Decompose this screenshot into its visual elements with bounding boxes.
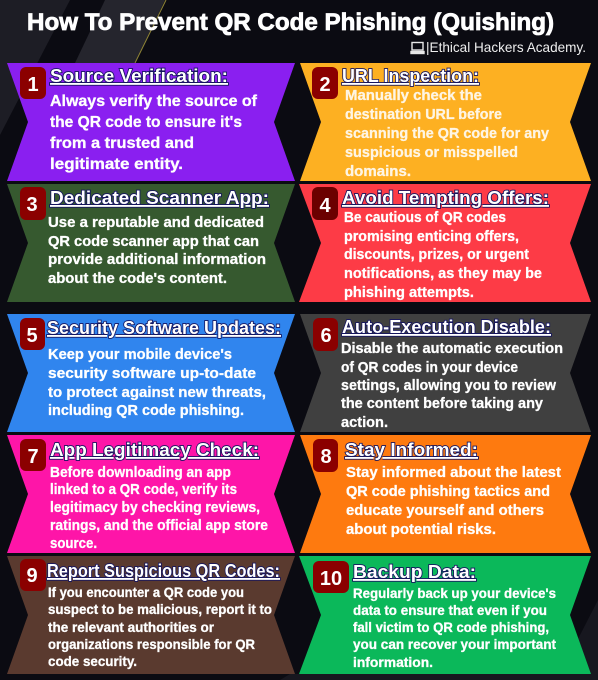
text 7: source. — [50, 536, 97, 552]
text 1: the QR code to ensure it's — [50, 114, 242, 131]
heading 1: Source Verification: — [50, 65, 228, 86]
badge 5: 5 — [26, 325, 38, 347]
badge 3: 3 — [26, 194, 38, 216]
badge 8 — [313, 439, 338, 472]
text 9 — [48, 585, 272, 669]
text 1: Always verify the source of — [50, 93, 258, 110]
text 2: Manually check the — [345, 88, 482, 104]
text 1: legitimate entity. — [50, 156, 183, 173]
text 9: the relevant authorities or — [48, 620, 215, 635]
text 6: settings, allowing you to review — [341, 378, 557, 394]
text 2: domains. — [345, 164, 411, 180]
text 10: information. — [353, 655, 433, 670]
badge 10 — [313, 561, 349, 593]
text 6: the content before taking any — [341, 396, 543, 412]
heading 9: Report Suspicious QR Codes: — [47, 560, 280, 581]
text 10: Regularly back up your device's — [353, 586, 556, 601]
text 7: Before downloading an app — [50, 465, 231, 481]
text 6: Disable the automatic execution — [341, 341, 563, 357]
text 2: suspicious or misspelled — [345, 145, 518, 161]
text 8: Stay informed about the latest — [346, 465, 561, 481]
badge 7 — [20, 439, 46, 471]
text 7 — [50, 465, 268, 552]
text 4 — [344, 210, 542, 301]
panel 8: Stay Informed — [300, 435, 591, 553]
text 9: organizations responsible for QR — [48, 637, 255, 652]
heading 10: Backup Data: — [353, 561, 476, 582]
text 10 — [353, 586, 556, 670]
text 10: you can recover your important — [353, 637, 556, 652]
panel 10: Backup Data — [299, 556, 591, 674]
badge 2 — [312, 67, 338, 99]
heading 7: App Legitimacy Check: — [50, 439, 259, 460]
text 5: Keep your mobile device's — [48, 347, 232, 363]
icon: laptop — [411, 42, 424, 54]
text 7: ratings, and the official app store — [50, 518, 268, 534]
text 2: scanning the QR code for any — [345, 126, 549, 142]
text 6 — [341, 341, 563, 431]
text 8 — [346, 465, 561, 538]
panel 4: Avoid Tempting Offers — [299, 184, 591, 302]
badge 2: 2 — [319, 74, 331, 96]
text 10: fall victim to QR code phishing, — [353, 620, 549, 635]
text 1: from a trusted and — [50, 135, 194, 152]
badge 7: 7 — [27, 446, 39, 468]
panel 1: Source Verification — [7, 63, 295, 181]
badge 9 — [20, 559, 46, 591]
text 6: of QR codes in your device — [341, 360, 518, 376]
text 7: legitimacy by checking reviews, — [50, 500, 260, 516]
heading 2: URL Inspection: — [342, 65, 479, 86]
text 5 — [48, 347, 266, 419]
text 8: educate yourself and others — [346, 503, 544, 519]
text 3: QR code scanner app that can — [48, 234, 259, 250]
badge 8: 8 — [320, 446, 332, 468]
badge 9: 9 — [26, 565, 38, 587]
text 10: data to ensure that even if you — [353, 603, 547, 618]
text 4: discounts, prizes, or urgent — [344, 247, 529, 263]
badge 10: 10 — [320, 568, 342, 590]
heading 5: Security Software Updates: — [47, 317, 281, 338]
text 8: QR code phishing tactics and — [346, 484, 550, 500]
badge 3 — [20, 187, 46, 220]
heading 3: Dedicated Scanner App: — [50, 187, 269, 208]
text 9: suspect to be malicious, report it to — [48, 602, 272, 617]
text 4: phishing attempts. — [344, 285, 474, 301]
text 8: about potential risks. — [346, 522, 496, 538]
text 3 — [48, 215, 266, 287]
badge 1 — [20, 67, 46, 99]
text 3: provide additional information — [48, 252, 266, 268]
text 2: destination URL before — [345, 107, 502, 123]
text 5: security software up-to-date — [48, 366, 256, 382]
badge 1: 1 — [27, 74, 39, 96]
text 7: linked to a QR code, verify its — [50, 482, 237, 498]
title: How To Prevent QR Code Phishing (Quishing) — [27, 9, 554, 36]
heading 8: Stay Informed: — [345, 439, 478, 460]
badge 4: 4 — [319, 195, 331, 217]
badge 6 — [313, 318, 338, 351]
text 6: action. — [341, 415, 388, 431]
text 3: Use a reputable and dedicated — [48, 215, 264, 231]
text 3: about the code's content. — [48, 271, 227, 287]
badge 4 — [312, 187, 338, 220]
panel 6: Auto-Execution Disable — [300, 314, 591, 432]
panel 2: URL Inspection — [300, 63, 591, 181]
text 4: notifications, as they may be — [344, 266, 542, 282]
badge 5 — [20, 318, 45, 350]
text 4: promising enticing offers, — [344, 229, 519, 245]
text 5: to protect against new threats, — [48, 385, 266, 401]
text 1 — [50, 93, 258, 173]
panel 7: App Legitimacy Check — [7, 435, 295, 553]
panel 3: Dedicated Scanner App — [7, 184, 295, 302]
logo: Ethical Hackers Academy: |Ethical Hackers Academy. — [426, 39, 586, 55]
panel 9: Report Suspicious QR Codes — [7, 556, 295, 674]
panel 5: Security Software Updates — [7, 314, 295, 432]
badge 6: 6 — [320, 325, 332, 347]
heading 4: Avoid Tempting Offers: — [342, 187, 549, 208]
text 9: If you encounter a QR code you — [48, 585, 244, 600]
text 4: Be cautious of QR codes — [344, 210, 506, 226]
heading 6: Auto-Execution Disable: — [342, 316, 551, 337]
text 5: including QR code phishing. — [48, 403, 244, 419]
text 2 — [345, 88, 549, 180]
text 9: code security. — [48, 654, 137, 669]
